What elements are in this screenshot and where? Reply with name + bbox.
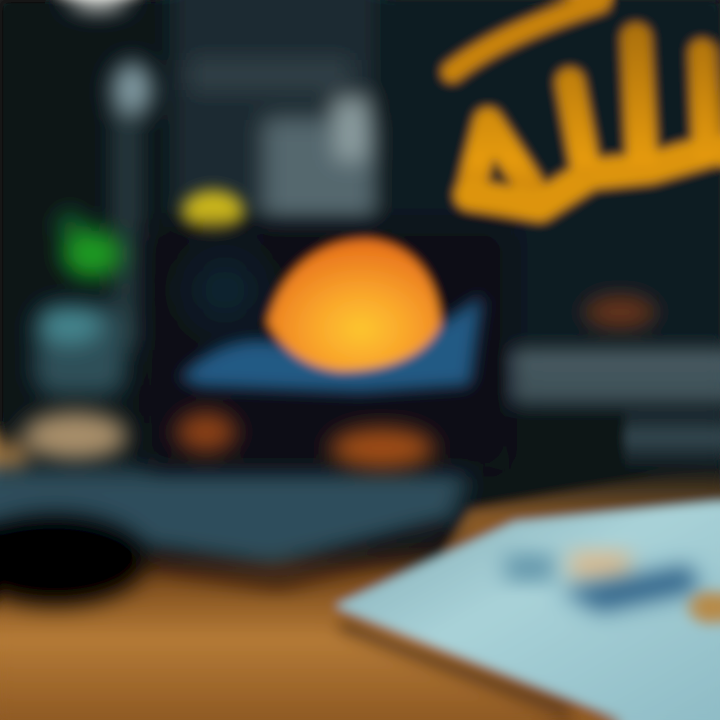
laptop shadow — [150, 530, 450, 580]
right teal shelf — [625, 405, 720, 470]
screen sun — [268, 240, 440, 371]
brown glow — [584, 296, 656, 328]
right grey object — [505, 335, 720, 417]
green blob — [56, 211, 122, 278]
screen bar left — [176, 412, 236, 452]
screen blue wave — [180, 295, 482, 392]
dark blob on desk — [0, 514, 147, 606]
background: left light column — [70, 0, 152, 350]
screen upper-left navy — [183, 248, 267, 332]
laptop screen frame — [148, 228, 508, 468]
screen bar right — [330, 428, 434, 468]
laptop base and keyboard — [0, 470, 470, 565]
paper shadow — [340, 625, 570, 712]
yellow blob — [183, 191, 243, 233]
desk surface — [0, 540, 720, 720]
beige object — [0, 412, 127, 474]
desk strip right — [420, 465, 720, 590]
paper sheet — [335, 502, 720, 720]
dark wall panel — [392, 0, 720, 340]
paper coloured chart — [505, 552, 720, 630]
laptop — [0, 228, 508, 565]
teal bottle — [35, 305, 125, 395]
neon orange scribble — [452, 2, 712, 206]
background: grey building — [170, 0, 380, 220]
